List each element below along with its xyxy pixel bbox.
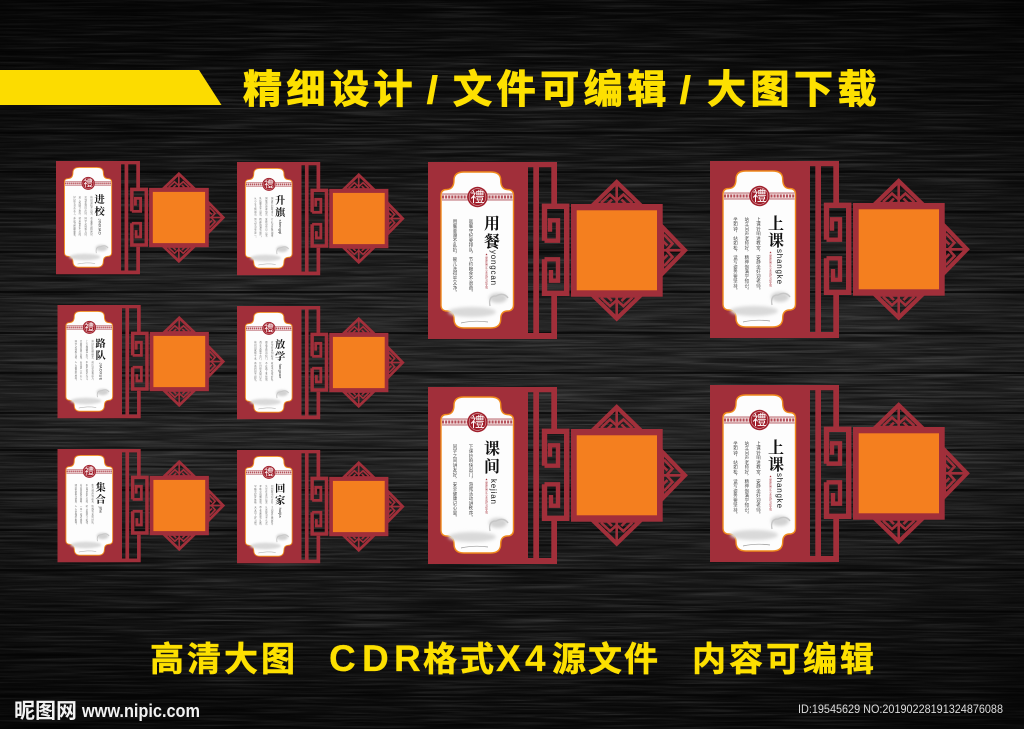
sign title — [484, 215, 500, 251]
pinyin label: huijia — [278, 508, 282, 518]
sign frame — [56, 161, 223, 274]
slogan text — [253, 196, 273, 239]
footer heading: X4 — [496, 638, 546, 679]
sign title: 学 — [275, 350, 286, 363]
pinyin label: fangxue — [278, 364, 282, 379]
slogan text — [452, 218, 474, 295]
sign title — [768, 439, 784, 474]
small red tagline: ★ 健康饮食从小养成好习惯文明 — [484, 477, 488, 514]
sign title — [484, 440, 500, 476]
slogan text: 国歌声声要响亮，爱我中华记心里， — [264, 196, 268, 239]
slogan text: 站立问声老师好，精神饱满学知识。 — [744, 216, 750, 293]
slogan text: 回到家中问声好，主动帮忙做家务， — [270, 484, 273, 527]
pinyin label: kejian — [489, 479, 498, 505]
footer heading: 格式 — [423, 641, 494, 679]
sign title: 家 — [275, 494, 285, 507]
small red tagline: ★ 健康饮食从小养成好习惯文明 — [768, 250, 772, 287]
small red tagline: ★ 健康饮食从小养成好习惯文明 — [768, 474, 772, 511]
panel: sign 上课 top — [710, 161, 967, 338]
sign title: 上 — [768, 439, 784, 457]
footer heading: 内容可编辑 — [692, 641, 877, 679]
sign title: 集 — [96, 481, 106, 494]
panel: sign 上课 bottom — [710, 385, 967, 562]
sign title — [275, 338, 286, 363]
sign title: 路 — [96, 337, 107, 350]
sign title — [96, 481, 106, 506]
slogan text: 下课铃响快出门，游戏活动讲秩序。 — [468, 444, 474, 520]
panel: sign 回家 — [237, 450, 403, 563]
footer heading: CDR — [329, 638, 421, 679]
sign title — [94, 193, 106, 218]
sign frame — [58, 305, 223, 418]
sign title: 升 — [275, 194, 285, 207]
slogan text: 放学铃声响起来，收拾书包排好队， — [270, 340, 273, 383]
title: / — [680, 70, 691, 112]
sign title: 合 — [96, 493, 106, 506]
slogan text: 用餐要遵不乱扔，碗儿洗得平又净。 — [452, 219, 458, 295]
slogan text: 早睡早起身体棒，天天向上好习惯。 — [253, 484, 257, 527]
image id: ID:19545629 NO:20190228191324876088 — [798, 702, 1003, 716]
panel: sign 进校 — [56, 161, 223, 274]
slogan text: 站立问声老师好，精神饱满学知识。 — [744, 440, 750, 517]
sign frame — [428, 162, 685, 339]
sign title: 进 — [94, 193, 106, 206]
title: 文件可编辑 — [453, 69, 671, 112]
slogan text — [74, 339, 94, 382]
sign title — [275, 483, 285, 507]
pinyin label: shangke — [775, 249, 784, 285]
slogan text: 排好队伍慢慢走，前后对齐看前方， — [91, 339, 94, 382]
pinyin label: shengqi — [278, 220, 282, 234]
sign title: 上 — [768, 215, 784, 233]
title: 大图下载 — [707, 69, 881, 112]
sign frame — [237, 162, 403, 275]
sign title: 课 — [768, 456, 784, 474]
sign title: 课 — [484, 440, 500, 458]
slogan text: 按时回家报平安，爸爸妈妈不担忧。 — [253, 340, 257, 383]
slogan text: 先写作业后玩耍，认真复习不马虎， — [264, 484, 268, 527]
slogan text: 就餐守纪要排队，节约粮食不浪费。 — [468, 218, 474, 295]
footer heading — [150, 638, 877, 679]
watermark logo — [14, 700, 200, 723]
yellow banner — [0, 70, 222, 105]
sign title: 间 — [484, 457, 500, 476]
slogan text: 团结友爱互帮助，人人争做好集体。 — [74, 483, 77, 526]
sign frame — [58, 449, 223, 562]
slogan text: 不说话来不打闹，听从指挥守纪律， — [85, 484, 88, 526]
sign title: 课 — [768, 232, 784, 250]
sign frame — [710, 385, 967, 562]
slogan text: 国旗升起要肃立，行礼注目敬国旗， — [270, 196, 273, 239]
sign frame — [237, 450, 403, 563]
slogan text: 跟着老师出校门，不在路上多停留， — [264, 340, 268, 383]
pinyin label: yongcan — [489, 250, 498, 286]
footer heading: 源文件 — [552, 641, 658, 679]
slogan text: 按时到校不迟到，衣着整洁精神好， — [89, 195, 93, 238]
slogan text — [73, 195, 93, 238]
pinyin label: JINXIAO — [97, 219, 102, 235]
slogan text: 集合哨声响起来，快静齐来排好队， — [91, 483, 94, 526]
slogan text: 从小立下报国志，努力学习争第一。 — [253, 197, 257, 239]
small red tagline: ★ 健康饮食从小养成好习惯文明 — [484, 252, 488, 289]
slogan text: 上课铃响进教室，安静坐好迎老师。 — [756, 216, 762, 293]
panel: sign 放学 — [237, 306, 403, 419]
slogan text: 走廊里面不奔跑，安全第一记心上， — [79, 339, 82, 382]
slogan text — [452, 444, 474, 520]
pinyin label: jihe — [98, 506, 102, 513]
sign title: 回 — [275, 483, 285, 495]
slogan text — [253, 484, 273, 527]
slogan text — [733, 440, 762, 517]
watermark logo: www.nipic.com — [81, 701, 200, 721]
slogan text: 上下楼梯靠右行，不推不挤讲礼让， — [85, 339, 88, 382]
slogan text: 进入校园守秩序，轻声慢步不打闹， — [78, 195, 81, 238]
pinyin label: shangke — [775, 473, 784, 509]
panel: sign 集合 — [58, 449, 223, 562]
slogan text — [733, 216, 762, 293]
title — [243, 69, 881, 112]
sign title: 队 — [96, 349, 107, 362]
sign title — [768, 215, 784, 250]
title: 精细设计 — [243, 69, 417, 112]
slogan text — [253, 340, 273, 383]
sign title: 校 — [94, 205, 106, 218]
slogan text: 站如青松有精神，一举一动讲规矩， — [79, 483, 82, 526]
watermark logo: 昵图网 — [14, 700, 77, 723]
sign frame — [237, 306, 403, 419]
slogan text: 同学之间讲友好，安全健康记心里。 — [452, 444, 458, 520]
slogan text: 见到老师问声好，同学之间相互好， — [84, 195, 87, 238]
panel: sign 升旗 — [237, 162, 403, 275]
pinyin label: JIAOXUE — [98, 363, 102, 381]
slogan text: 好好学习天天上，养成习惯最重要。 — [73, 195, 76, 238]
slogan text: 上课铃响进教室，安静坐好迎老师。 — [756, 440, 762, 517]
slogan text: 孝敬父母懂感恩，尊老爱幼有礼数， — [259, 484, 262, 527]
panel: sign 用餐 — [428, 162, 685, 339]
sign title: 用 — [484, 215, 500, 233]
slogan text — [74, 483, 94, 526]
sign frame — [428, 387, 685, 564]
title: / — [427, 70, 438, 112]
sign title: 旗 — [275, 206, 286, 219]
sign frame — [710, 161, 967, 338]
footer heading: 高清大图 — [150, 641, 298, 679]
panel: sign 路队 — [58, 305, 223, 418]
sign title: 放 — [275, 338, 286, 351]
slogan text: 坐如钟，站如松，读写姿势要坚持。 — [733, 216, 738, 293]
slogan text: 坐如钟，站如松，读写姿势要坚持。 — [733, 440, 738, 517]
sign title — [275, 194, 286, 219]
slogan text: 队伍整齐不说话，精神饱满有朝气， — [259, 196, 262, 239]
panel: sign 课间 — [428, 387, 685, 564]
slogan text: 遵守交规靠右行，红灯停来绿灯走， — [259, 340, 262, 383]
sign title — [96, 337, 107, 362]
sign title: 餐 — [484, 232, 500, 251]
slogan text: 同学之间相互帮，人人都是好榜样。 — [74, 339, 77, 382]
